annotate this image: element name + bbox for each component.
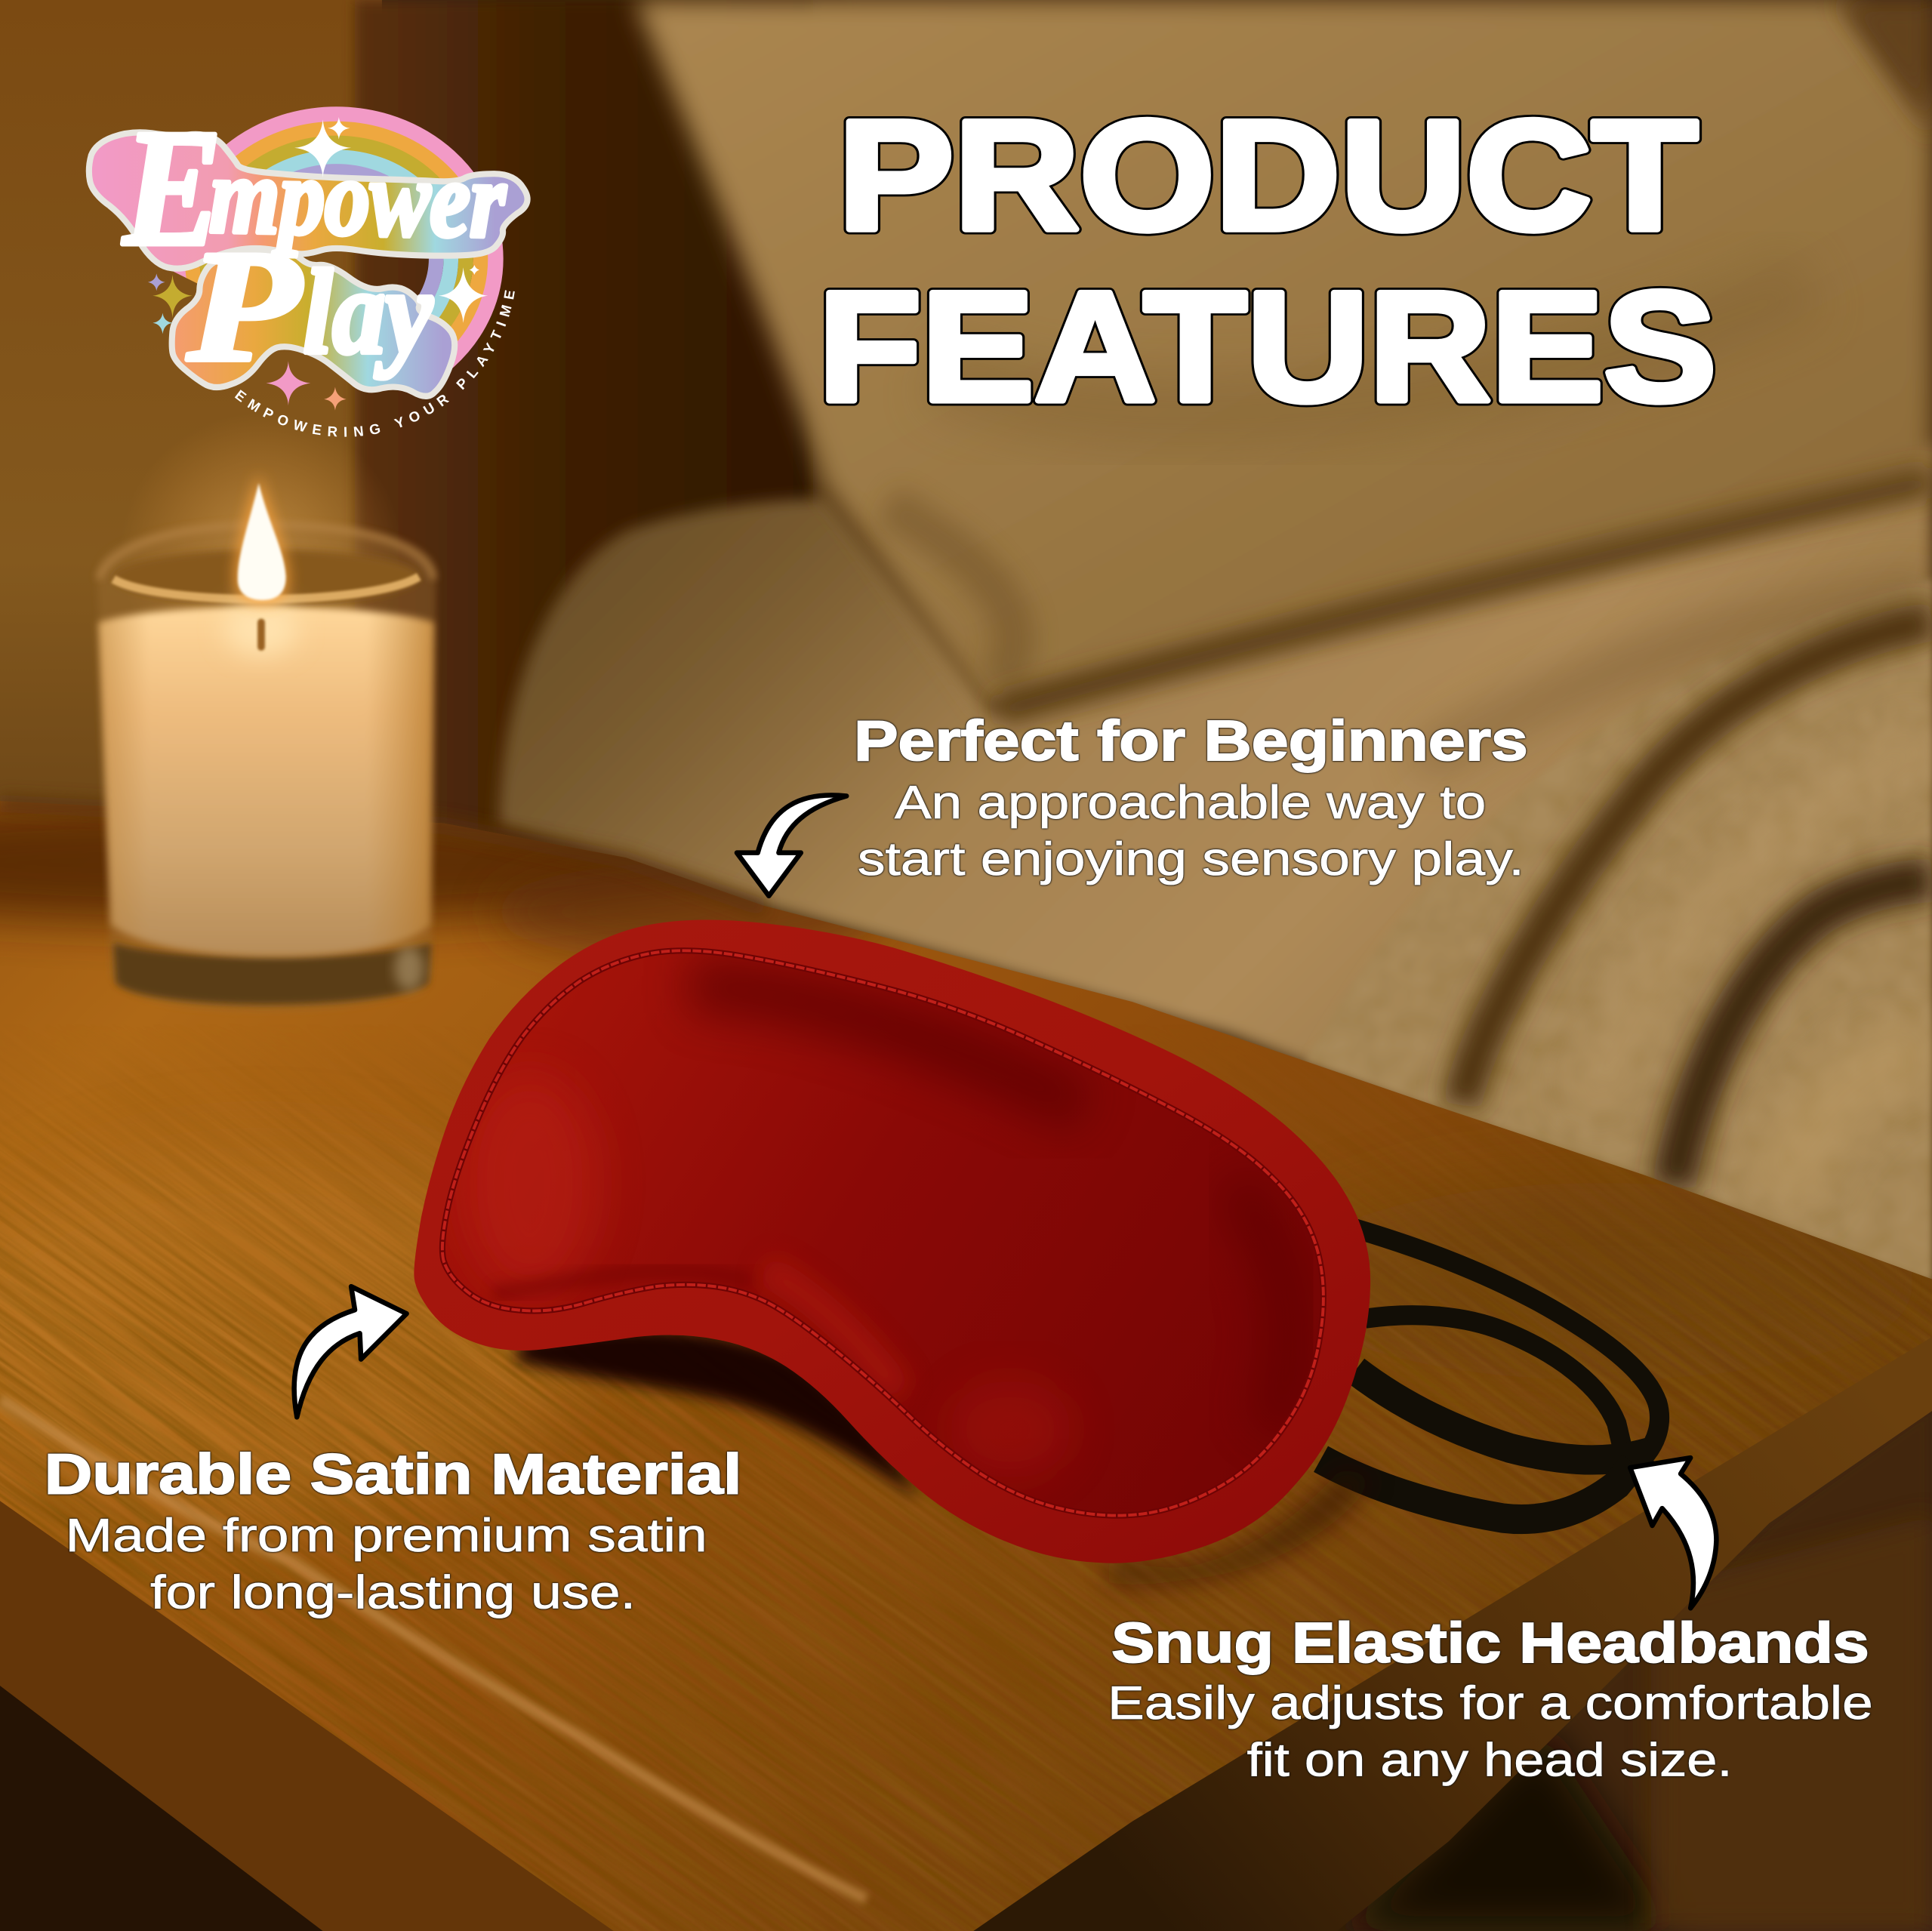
callout: Snug Elastic Headbands bbox=[1108, 1611, 1873, 1786]
logo word: Empower: mpower bbox=[208, 136, 507, 261]
callout: Perfect for Beginners bbox=[854, 709, 1528, 885]
logo word: Play: P bbox=[186, 217, 302, 395]
logo word: Play: lay bbox=[303, 245, 433, 379]
mask stitching bbox=[442, 950, 1323, 1516]
icon: flame bbox=[236, 473, 288, 604]
callout: Snug Elastic Headbands: Snug Elastic Headbands bbox=[1111, 1611, 1869, 1674]
logo word: Empower bbox=[122, 95, 507, 281]
callout: Perfect for Beginners: start enjoying sensory play. bbox=[858, 833, 1524, 885]
logo rainbow bbox=[177, 115, 495, 403]
callout: Perfect for Beginners: Perfect for Beginners bbox=[854, 709, 1528, 772]
straps: black elastic headbands bbox=[1321, 1229, 1659, 1520]
title bbox=[818, 88, 1716, 434]
logo word: Play bbox=[186, 217, 433, 395]
logo tagline on arc bbox=[234, 280, 516, 437]
candle in glass jar bbox=[97, 413, 436, 1011]
mask inner satin panel bbox=[482, 954, 1320, 1513]
callout: Durable Satin Material: for long-lasting use. bbox=[150, 1566, 636, 1618]
callout: Durable Satin Material bbox=[45, 1442, 741, 1618]
title: PRODUCT bbox=[838, 88, 1698, 263]
logo: Empower Play bbox=[86, 95, 531, 437]
red satin eye mask bbox=[407, 912, 1380, 1585]
logo sticker: Play backing bbox=[172, 251, 454, 396]
callout: Perfect for Beginners: An approachable way to bbox=[895, 777, 1486, 829]
callout: Durable Satin Material: Made from premium satin bbox=[65, 1510, 707, 1562]
arrow: to headband bbox=[1630, 1458, 1716, 1608]
arrow: to mask edge bbox=[294, 1286, 407, 1417]
logo sparkles bbox=[148, 117, 488, 411]
callout: Snug Elastic Headbands: Easily adjusts for a comfortable bbox=[1108, 1677, 1873, 1729]
title: PRODUCT bbox=[838, 88, 1698, 263]
callout: Durable Satin Material: Durable Satin Material bbox=[45, 1442, 741, 1505]
arrow: to mask top bbox=[737, 795, 846, 896]
callout: Snug Elastic Headbands: fit on any head size. bbox=[1247, 1734, 1733, 1786]
logo: Empower Play: EMPOWERING YOUR PLAYTIME bbox=[234, 290, 515, 437]
logo word: Empower: E bbox=[122, 95, 222, 281]
title: FEATURES bbox=[818, 259, 1716, 434]
title: FEATURES bbox=[818, 259, 1716, 434]
logo sticker: Empower backing bbox=[89, 132, 528, 269]
mask outer binding bbox=[414, 919, 1370, 1563]
